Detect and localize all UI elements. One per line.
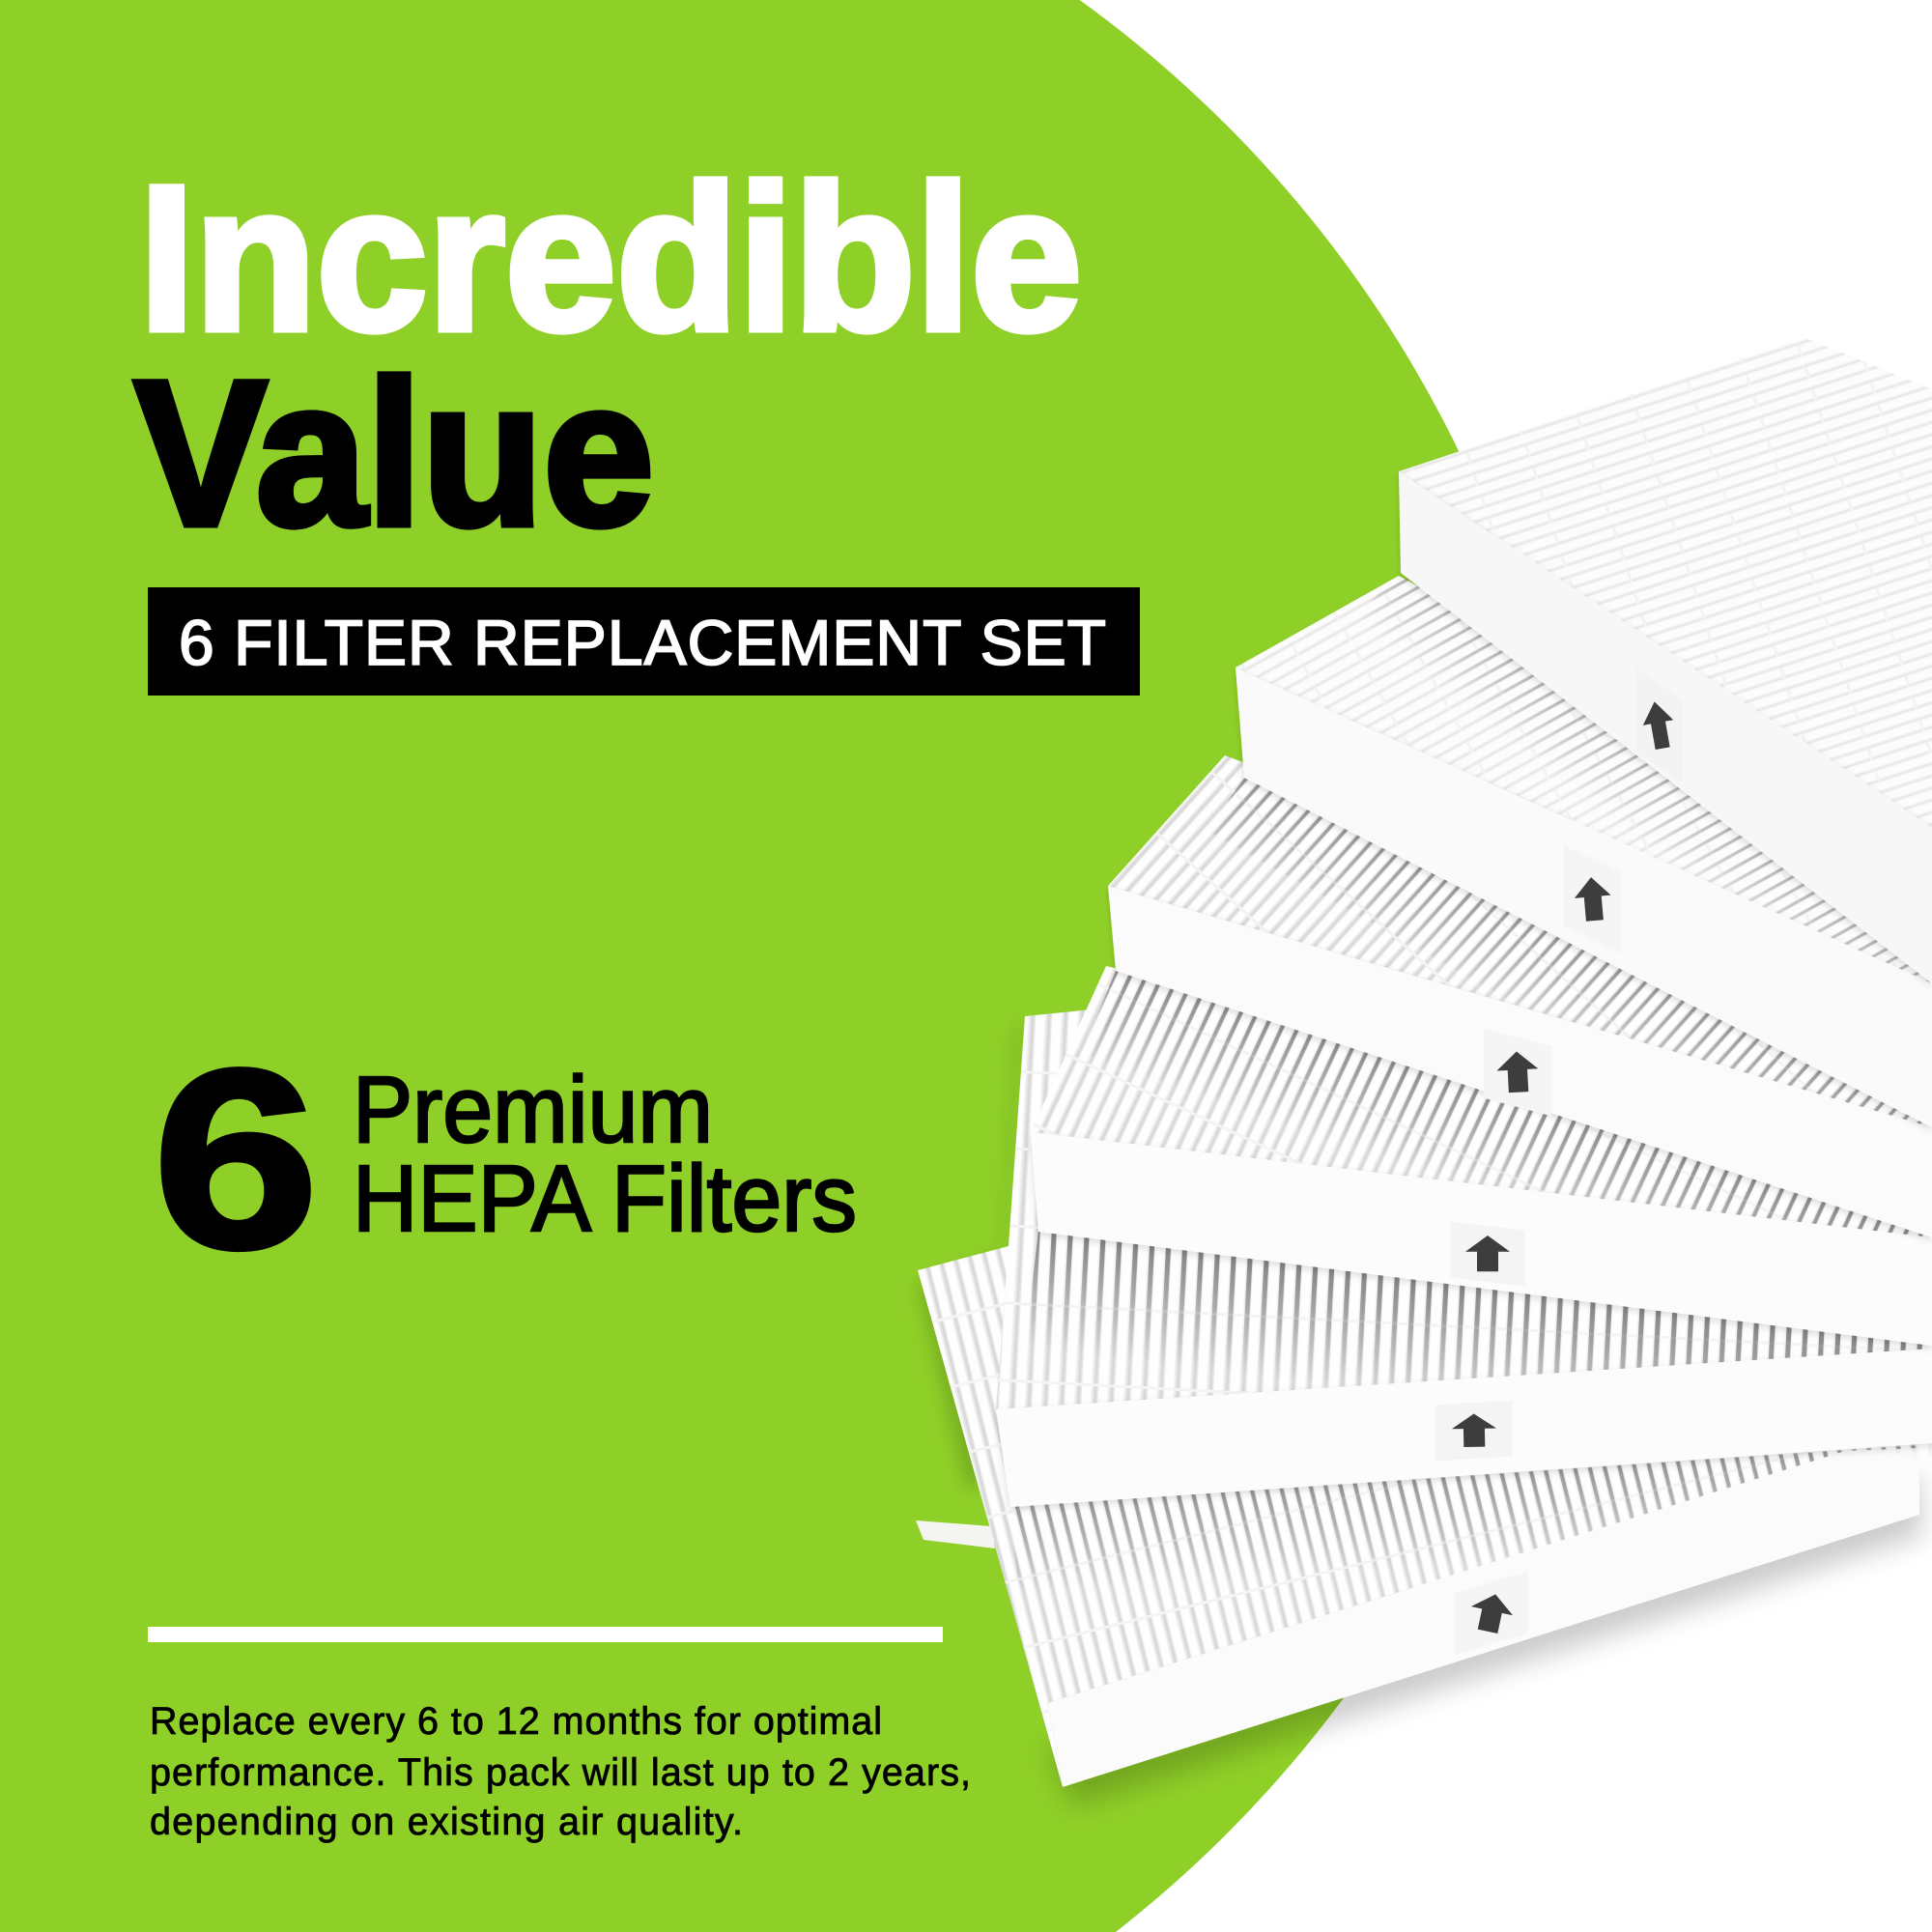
filter 5 [996,1009,1932,1507]
filter 6 (bottom) [916,1246,1919,1787]
pleats 3 [1108,755,1932,1127]
cast shadow under filters [1048,1473,1922,1806]
shadow along left edges on green [918,1024,1024,1488]
label: Premium HEPA Filters: Premium [353,1057,713,1162]
pleats 4 [1031,966,1932,1237]
body text [150,1700,971,1843]
label: Premium HEPA Filters: HEPA Filters [353,1146,857,1251]
filter 2 [1236,573,1932,1127]
filter 3 [1108,755,1932,1237]
paper tab [916,1520,995,1548]
label: Premium HEPA Filters [353,1057,857,1251]
frame strip 2 with sticker [1236,668,1932,1127]
body text: performance. This pack will last up to 2 years, [150,1751,971,1794]
pleats 6 [918,1246,1919,1787]
pleats 2 [1236,576,1932,983]
divider bar [148,1627,943,1642]
product photo: fan of six HEPA filters [916,337,1932,1806]
pleats 5 [996,1009,1932,1409]
body text: Replace every 6 to 12 months for optimal [150,1700,882,1743]
filter 4 [1031,966,1932,1352]
filter 1 (top) [1399,337,1932,983]
big numeral 6: 6 [153,1016,319,1301]
frame strip 6 with sticker [1047,1448,1919,1787]
frame strip 4 with sticker [1031,1132,1932,1346]
title: Incredible: Incredible [139,143,1082,374]
badge: 6 filter replacement set: 6 FILTER REPLACEMENT SET [179,607,1106,678]
pleats 1 [1399,337,1932,828]
frame strip 3 with sticker [1108,886,1932,1237]
frame strip 1 with sticker [1399,471,1932,983]
frame strip 5 with sticker [996,1349,1932,1507]
body text: depending on existing air quality. [150,1801,743,1843]
title: Value: Value [134,338,654,569]
badge: 6 filter replacement set [148,587,1140,696]
